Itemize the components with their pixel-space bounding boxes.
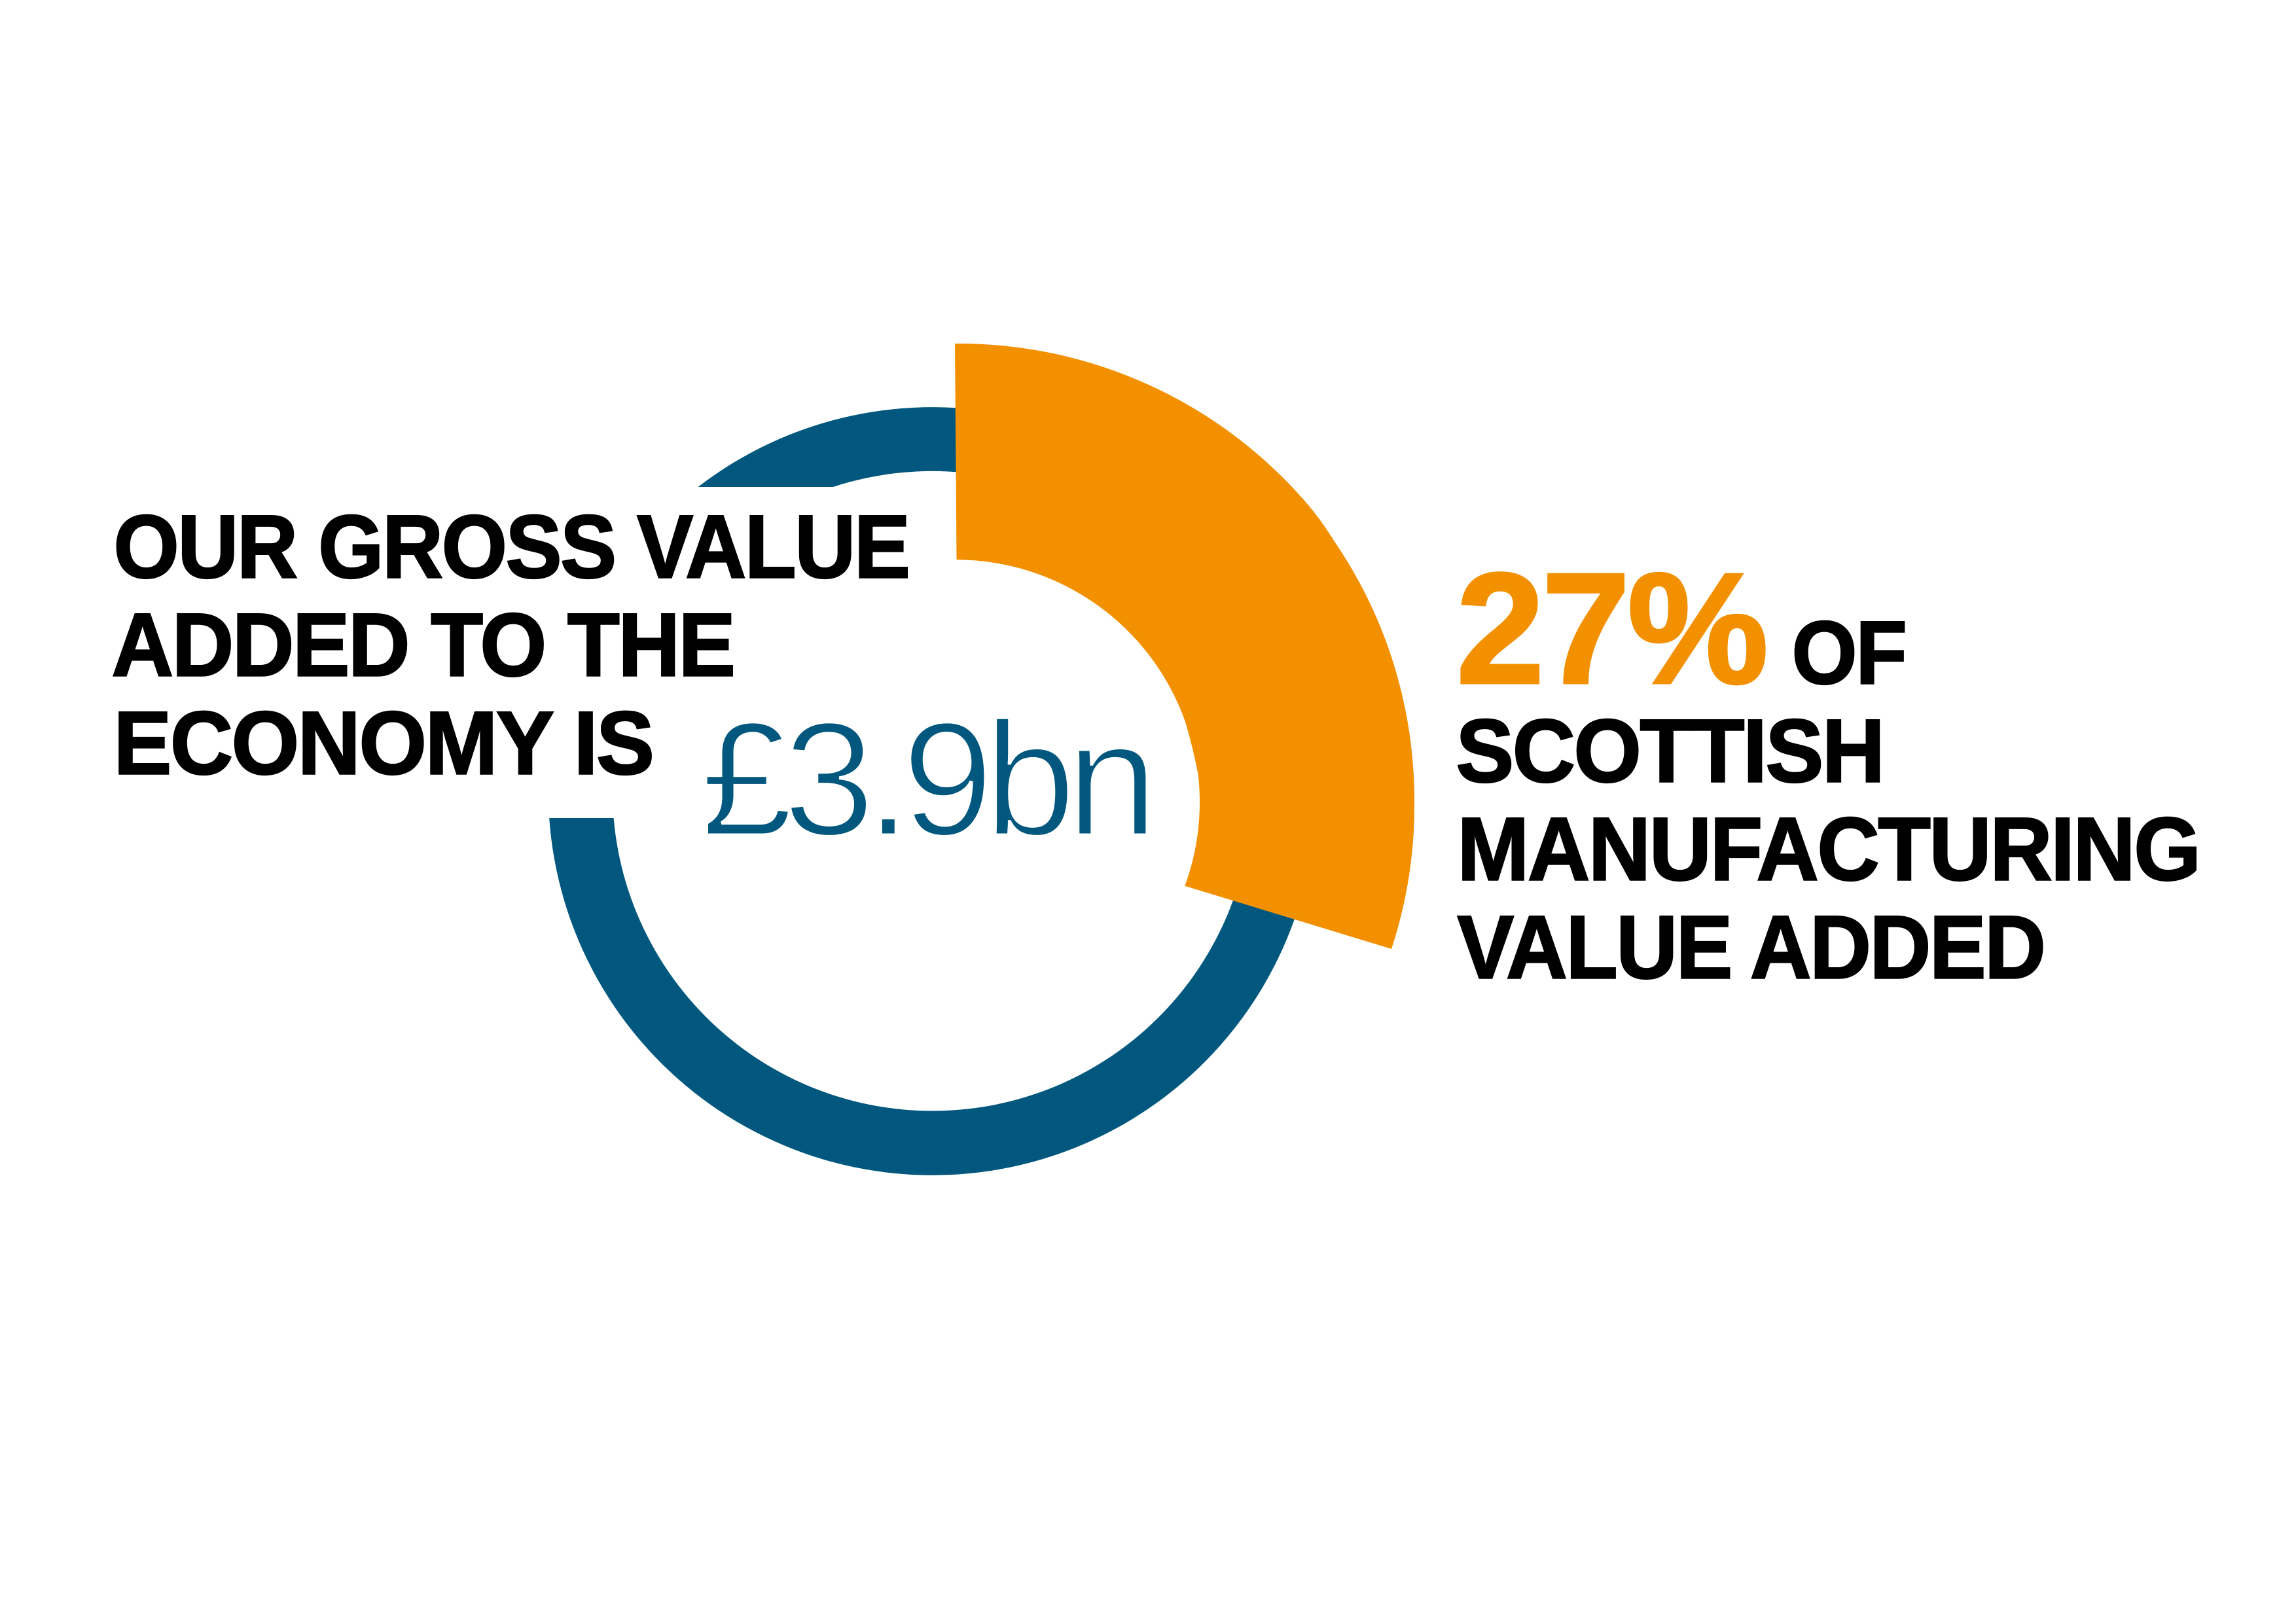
value: £3.9bn: £3.9bn — [701, 688, 1149, 870]
left heading: ECONOMY IS — [114, 694, 653, 793]
right callout: 27% of Scottish manufacturing value added — [1456, 541, 2199, 997]
blue donut ring — [549, 407, 1316, 1175]
callout text — [1456, 603, 2199, 997]
callout text: MANUFACTURING — [1457, 800, 2199, 899]
callout text: OF — [1792, 603, 1906, 703]
callout text: VALUE ADDED — [1457, 898, 2045, 997]
percentage figure: 27% — [1456, 541, 1766, 717]
left heading — [111, 497, 908, 793]
orange highlighted segment — [955, 344, 1414, 949]
callout text: SCOTTISH — [1456, 702, 1884, 801]
left heading: ADDED TO THE — [111, 596, 734, 695]
left heading: OUR GROSS VALUE — [114, 497, 908, 597]
